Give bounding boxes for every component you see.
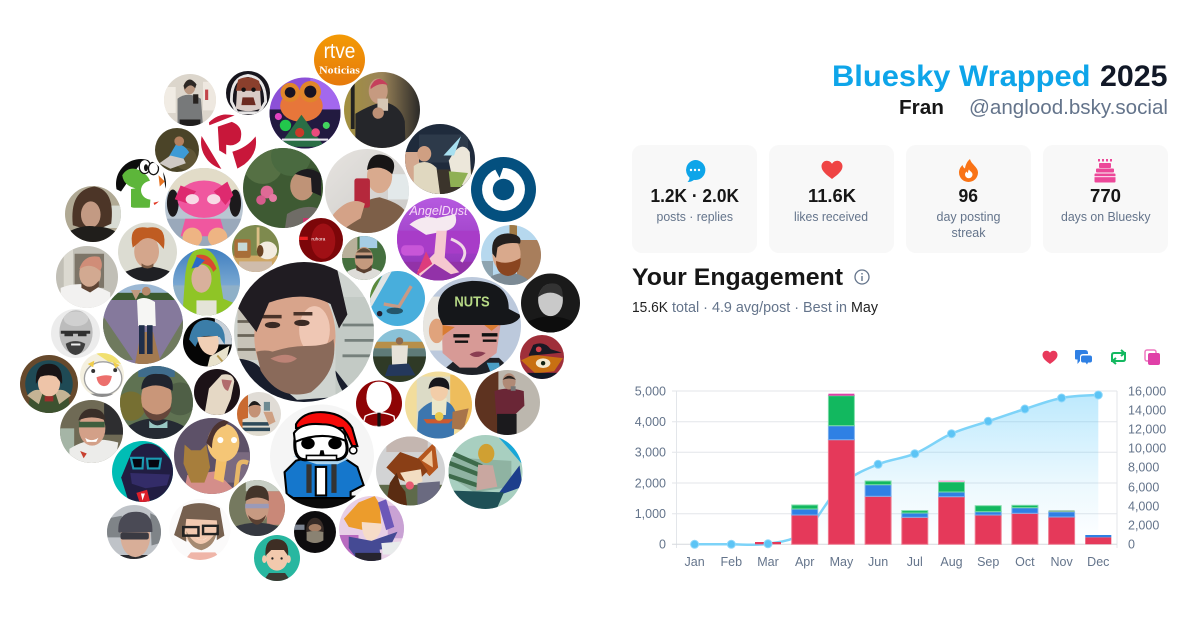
month labels: Feb <box>721 555 742 569</box>
icon: info <box>855 270 869 284</box>
right axis labels: 12,000 <box>1128 422 1166 436</box>
left axis labels: 5,000 <box>635 384 666 398</box>
engagement summary line: May <box>851 300 879 316</box>
avatar: fox character peace sign <box>376 436 445 506</box>
stat card: posts and replies <box>632 145 757 253</box>
bar: Jul <box>902 511 928 544</box>
title: Bluesky Wrapped 2025: 2025 <box>1100 60 1168 93</box>
right axis labels: 4,000 <box>1128 500 1159 514</box>
left axis labels: 3,000 <box>635 446 666 460</box>
icon: flame <box>959 159 978 182</box>
avatar cluster <box>20 34 580 581</box>
avatar: black and white portrait <box>521 274 580 332</box>
avatar: red P logo <box>201 114 257 170</box>
bar: Mar <box>755 542 781 544</box>
right axis labels: 2,000 <box>1128 518 1159 532</box>
right axis labels: 16,000 <box>1128 384 1166 398</box>
avatar: colourful book illustration <box>448 435 522 509</box>
avatar: white cat yawning <box>194 369 240 415</box>
chart grid <box>672 391 1117 548</box>
avatar: man with green glasses white shirt <box>60 400 123 463</box>
month labels: Jun <box>868 555 888 569</box>
month labels: Sep <box>977 555 999 569</box>
month labels <box>685 555 1109 569</box>
stat card: day posting streak: 96 <box>958 186 978 206</box>
icon: likes heart <box>1042 351 1058 364</box>
avatar: blond man white shirt <box>56 246 118 308</box>
avatar: cartoon man glasses beard <box>170 499 230 560</box>
cumulative area <box>695 395 1098 545</box>
legend icons <box>1042 350 1160 365</box>
avatar: cartoon dog scene <box>232 225 279 274</box>
stat card: likes received: 11.6K <box>808 186 856 206</box>
stat card: days on Bluesky: days on Bluesky <box>1061 209 1151 224</box>
bar: Apr <box>792 505 818 544</box>
left axis labels: 0 <box>659 538 666 552</box>
right axis labels: 0 <box>1128 538 1135 552</box>
avatar: yellow illustration boy with tray <box>405 372 472 438</box>
chart: monthly engagement stacked bars with cumulative line <box>635 384 1166 569</box>
stat card: likes received: likes received <box>794 209 868 224</box>
avatar: green hoodie rainbow hair <box>173 248 240 316</box>
bar: Dec <box>1085 535 1111 544</box>
right axis labels <box>1128 384 1166 552</box>
icon: reposts arrows <box>1112 350 1125 364</box>
avatar: orange frog with sunglasses <box>270 78 340 148</box>
bar: Aug <box>938 480 964 544</box>
month labels: Nov <box>1050 555 1073 569</box>
right axis labels: 8,000 <box>1128 460 1159 474</box>
stat card: days on Bluesky <box>1043 145 1168 253</box>
left axis labels: 1,000 <box>635 507 666 521</box>
left axis labels: 4,000 <box>635 415 666 429</box>
month labels: Oct <box>1015 555 1035 569</box>
avatar: boy in blue sitting on ground <box>155 128 199 172</box>
user name and handle: Fran <box>899 97 944 119</box>
avatar: curly long hair <box>65 186 121 242</box>
icon: replies chat <box>1075 350 1092 364</box>
avatar: blue ring logo <box>471 157 536 222</box>
left axis labels: 2,000 <box>635 476 666 490</box>
user name and handle: @anglood.bsky.social <box>969 97 1168 119</box>
line points <box>691 391 1102 548</box>
avatar: cartoon man green background <box>254 535 300 581</box>
avatar: man in maroon shirt mirror <box>475 370 540 435</box>
avatar: blue-haired anime <box>183 318 232 366</box>
engagement summary line: total · 4.9 avg/post · Best in <box>672 300 847 316</box>
avatar: Yoshi <box>116 159 166 209</box>
avatar: girl illustrated brown frame <box>20 355 78 413</box>
avatar: man with glasses outdoors <box>342 236 386 280</box>
avatar: orange-haired man with earring <box>118 222 177 282</box>
avatar: Angel Dust purple <box>397 198 480 280</box>
cumulative line <box>695 395 1098 545</box>
avatar: Darth Vader teal <box>112 441 173 502</box>
avatar: bearded man glasses road <box>229 480 285 536</box>
month labels: Aug <box>940 555 963 569</box>
avatar: man in beanie <box>107 505 161 559</box>
stat card: day posting streak: streak <box>952 225 986 240</box>
month labels: Mar <box>757 555 779 569</box>
month labels: Apr <box>795 555 814 569</box>
avatar: pink bulldog Snubbull <box>165 168 243 247</box>
icon: quotes squares <box>1145 350 1160 365</box>
avatar: cartoon woman with cat <box>174 418 250 494</box>
avatar: person sitting by lake <box>373 329 426 383</box>
avatar: swimmer in pool <box>370 271 425 326</box>
stat card: day posting streak: day posting <box>936 209 1000 224</box>
avatar: NUTS cap cartoon <box>423 277 521 375</box>
stacked bars <box>755 394 1111 544</box>
bar: Sep <box>975 506 1001 544</box>
right axis labels: 6,000 <box>1128 480 1159 494</box>
avatar: red background white-haired character <box>356 380 402 426</box>
stat card: likes received <box>769 145 894 253</box>
bar: Nov <box>1049 510 1075 544</box>
avatar: bearded man on balcony <box>481 225 541 285</box>
month labels: Jan <box>685 555 705 569</box>
avatar: pixel Sans with Santa hat <box>270 404 374 511</box>
bar: Jun <box>865 481 891 544</box>
avatar: Neku anime <box>339 496 404 561</box>
avatar: pink-hair man in elevator <box>344 72 420 148</box>
right axis labels: 14,000 <box>1128 404 1166 418</box>
title: Bluesky Wrapped 2025: Bluesky Wrapped <box>832 60 1090 93</box>
avatar: man with glasses beside flowers <box>243 148 323 228</box>
heading: Your Engagement: Your Engagement <box>632 264 843 291</box>
icon: chat bubble <box>686 160 705 182</box>
avatar: man with anime figure <box>405 124 475 194</box>
avatar: grey bald man glasses <box>51 309 100 358</box>
avatar: red fox with cap <box>520 335 564 381</box>
avatar: red portrait ruhora <box>299 218 343 262</box>
stat card: days on Bluesky: 770 <box>1090 186 1121 206</box>
right axis labels: 10,000 <box>1128 442 1166 456</box>
avatar: white cartoon cat <box>80 353 124 398</box>
avatar: man mirror selfie grey shirt <box>164 74 216 127</box>
month labels: May <box>830 555 854 569</box>
avatar: striped shirt mirror selfie <box>237 392 281 436</box>
avatar: dark photo with mask <box>294 511 336 553</box>
stat card: posts and replies: 1.2K · 2.0K <box>650 186 739 206</box>
icon: birthday cake <box>1094 159 1116 182</box>
avatar: smiling man with red phone <box>325 149 409 233</box>
stat card: day posting streak <box>906 145 1031 253</box>
month labels: Dec <box>1087 555 1109 569</box>
avatar: man in lavender field <box>103 284 183 364</box>
left axis labels <box>635 384 666 552</box>
bar: Oct <box>1012 505 1038 544</box>
avatar: rtve Noticias logo <box>314 34 365 86</box>
month labels: Jul <box>907 555 923 569</box>
icon: heart <box>822 161 842 179</box>
avatar: main portrait selfie <box>234 262 374 402</box>
avatar: gorilla cartoon <box>226 71 270 115</box>
bar: May <box>828 394 854 544</box>
engagement summary line: 15.6K <box>632 300 668 316</box>
avatar: smiling man in green garden <box>116 366 197 439</box>
stat card: posts and replies: posts · replies <box>656 209 733 224</box>
